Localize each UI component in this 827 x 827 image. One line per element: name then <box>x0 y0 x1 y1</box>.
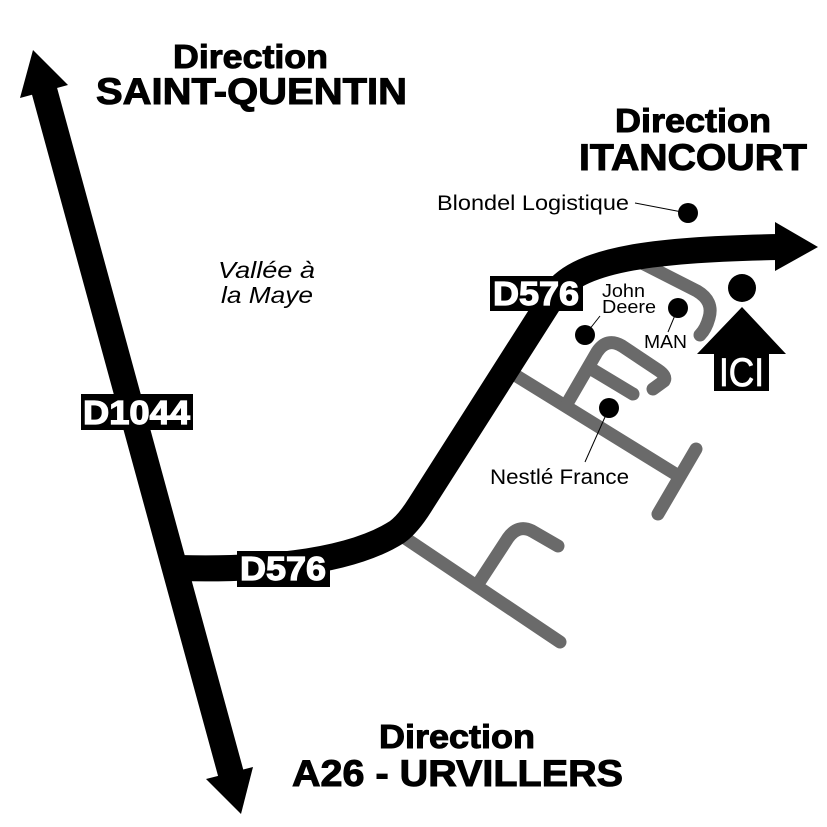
marker: John Deere: John <box>602 281 645 301</box>
marker: Nestlé France: Nestlé France <box>490 466 629 489</box>
label: D1044: D1044 <box>83 394 191 431</box>
heading: A26 Urvillers: A26 - URVILLERS <box>292 753 623 794</box>
heading: Itancourt: ITANCOURT <box>579 137 807 178</box>
text: Vallée à la Maye <box>218 257 315 308</box>
marker: MAN <box>644 298 688 352</box>
heading: Saint-Quentin: Direction <box>173 38 328 75</box>
heading: A26 Urvillers: Direction <box>379 718 535 755</box>
label: D576 upper: D576 <box>493 275 579 312</box>
icon: ICI location marker <box>697 274 786 395</box>
road D576 arrow <box>178 222 818 568</box>
marker: John Deere <box>575 281 656 345</box>
text: Vallée à la Maye: Vallée à <box>218 257 315 283</box>
heading: Itancourt <box>579 102 807 178</box>
heading: Itancourt: Direction <box>615 102 771 139</box>
heading: A26 Urvillers <box>292 718 623 794</box>
marker: John Deere: Deere <box>602 297 656 317</box>
service roads <box>405 262 710 642</box>
icon: ICI location marker: ICI <box>719 351 764 395</box>
label: D576 lower: D576 <box>240 550 326 587</box>
marker: MAN: MAN <box>644 332 687 352</box>
text: Vallée à la Maye: la Maye <box>221 282 313 308</box>
heading: Saint-Quentin: SAINT-QUENTIN <box>96 71 407 112</box>
road D1044 arrow <box>20 50 253 814</box>
marker: Blondel Logistique: Blondel Logistique <box>437 192 629 215</box>
marker: Blondel Logistique <box>437 192 698 223</box>
heading: Saint-Quentin <box>96 38 407 112</box>
marker: Nestlé France <box>490 398 629 489</box>
